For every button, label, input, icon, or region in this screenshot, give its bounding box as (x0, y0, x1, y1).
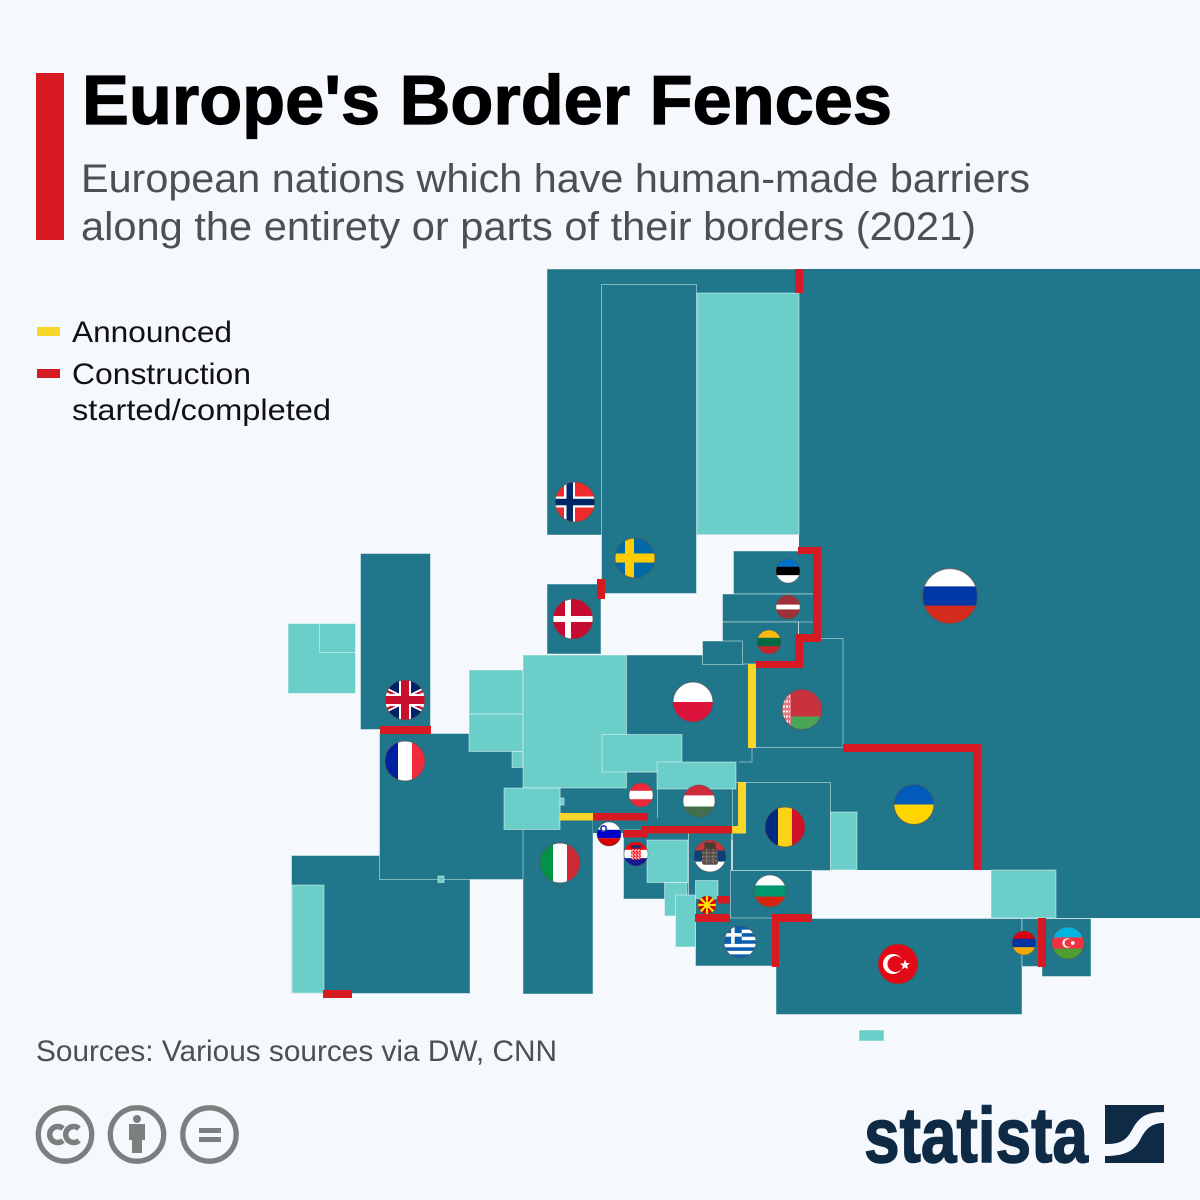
subtitle: along the entirety or parts of their borders (2021) (81, 205, 976, 249)
subtitle: European nations which have human-made barriers (81, 157, 1030, 201)
map of countries (288, 269, 1200, 1041)
flag: Serbia (694, 840, 726, 872)
flag: Estonia (776, 559, 800, 583)
icon: creative commons (38, 1108, 236, 1161)
fences under construction or completed (323, 269, 1046, 998)
flag: United Kingdom (384, 680, 426, 720)
icon: attribution (110, 1108, 164, 1161)
flag: Bulgaria (754, 875, 786, 907)
icon: cc (38, 1108, 92, 1161)
flag: France (385, 741, 425, 781)
legend: construction started/completed: started/completed (72, 394, 331, 427)
flag: Ukraine (894, 784, 934, 824)
legend: construction started/completed: Construction (72, 358, 251, 391)
flag: Denmark (553, 599, 593, 639)
announced fences (559, 664, 756, 834)
flag: Croatia (624, 842, 648, 866)
flag: Hungary (683, 785, 715, 817)
flag: Armenia (1012, 931, 1036, 955)
flag: Poland (673, 682, 713, 722)
flag: Belarus (782, 690, 822, 730)
sources: Sources: Various sources via DW, CNN (36, 1035, 557, 1068)
flag: Latvia (776, 595, 800, 619)
icon: no derivatives (183, 1108, 236, 1161)
flag: Norway (555, 482, 595, 522)
flag: Lithuania (757, 630, 781, 654)
flag: Romania (765, 807, 805, 847)
flag: Turkey (878, 944, 918, 984)
legend: construction started/completed (37, 358, 331, 427)
title: Europe's Border Fences (82, 61, 892, 139)
flag: Russia (922, 568, 978, 624)
accent bar (36, 73, 64, 240)
EU and non-fence countries (288, 293, 1056, 1041)
flag: Italy (540, 843, 580, 883)
flag: Greece (724, 926, 756, 958)
flag: North Macedonia (698, 896, 716, 914)
flag: Slovenia (597, 822, 621, 846)
flag: Austria (629, 783, 653, 807)
legend: announced: Announced (72, 316, 232, 349)
flag: Sweden (615, 538, 655, 578)
flag: Azerbaijan (1052, 927, 1084, 959)
dark countries (292, 269, 1200, 1014)
legend (37, 316, 331, 427)
subtitle (81, 157, 1030, 249)
statista wordmark: statista (864, 1091, 1088, 1179)
statista logo icon (1105, 1105, 1164, 1163)
